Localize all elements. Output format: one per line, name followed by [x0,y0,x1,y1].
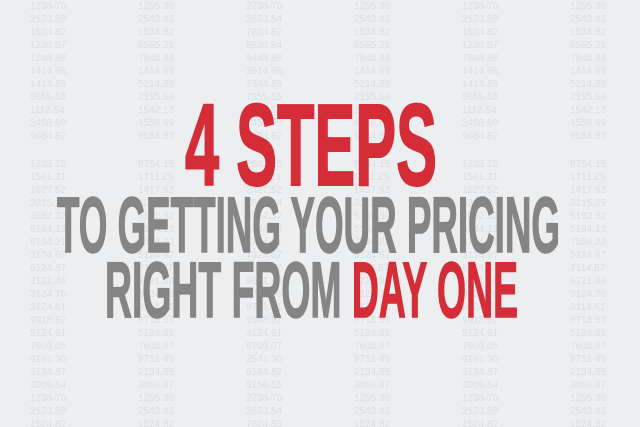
background number columns: 8751.45 [354,354,391,365]
background number columns: 5124.61 [354,328,391,339]
background number columns: 7605.67 [138,341,175,352]
background number columns: 3124.76 [354,289,391,300]
background number columns: 5214.89 [570,79,607,90]
background number columns: 3552.32 [30,211,67,222]
background number columns: 5124.61 [30,328,67,339]
background number columns: 1235.87 [30,40,67,51]
background number columns: 6565.21 [138,40,175,51]
background number columns: 3124.61 [462,302,499,313]
background number columns: 2344.89 [246,79,283,90]
background number columns: 7848.88 [462,53,499,64]
background number columns: 6565.21 [354,40,391,51]
background number columns: 3124.76 [138,289,175,300]
background number columns: 1255.36 [570,1,607,12]
background number columns: 5124.61 [354,302,391,313]
background number columns: 9654.87 [138,131,175,142]
background number columns: 8751.45 [570,354,607,365]
background number columns: 7848.88 [570,53,607,64]
background number columns: 1414.68 [462,66,499,77]
background number columns: 1711.25 [138,172,174,183]
background number columns: 3121.46 [30,276,67,287]
background number columns: 1711.25 [570,172,606,183]
background number columns: 4558.69 [570,118,607,129]
background number columns: 3056.87 [138,380,175,391]
background number columns: 8654.87 [246,131,283,142]
background number columns: 7848.88 [354,53,391,64]
background number columns: 1414.68 [138,66,175,77]
background number columns: 3124.67 [30,250,67,261]
background number columns: 3514.65 [246,66,283,77]
background number columns: 2427.52 [246,185,283,196]
background number columns: 7824.87 [246,27,283,38]
background number columns: 3124.76 [570,289,607,300]
background number columns: 9918.87 [462,315,499,326]
background number columns: 2543.42 [354,406,391,417]
background number columns: 2155.58 [570,92,607,103]
background number columns: 6124.87 [462,263,499,274]
background number columns: 2134.87 [30,367,67,378]
background number columns: 8794.21 [462,237,499,248]
background number columns: 9721.88 [570,276,607,287]
background number columns: 8741.61 [246,302,283,313]
background number columns: 8705.07 [246,341,283,352]
background number columns: 1414.89 [30,79,67,90]
background number columns: 8718.67 [570,315,607,326]
background number columns: 5184.13 [354,224,391,235]
background number columns: 1414.68 [30,66,67,77]
background number columns: 2155.58 [138,92,175,103]
background number columns: 1524.82 [30,27,67,38]
background number columns: 3215.25 [570,198,607,209]
background number columns: 1527.52 [30,185,67,196]
background number columns: 1255.36 [138,1,175,12]
background number columns: 7605.67 [570,341,607,352]
background number columns: 3215.24 [30,198,67,209]
background number columns: 5552.32 [246,211,283,222]
background number columns: 2543.15 [246,159,283,170]
background number columns: 3124.76 [462,289,499,300]
background number columns: 5214.89 [354,79,391,90]
background number columns: 1524.82 [354,27,391,38]
background number columns: 9654.87 [30,131,67,142]
background number columns: 1235.87 [462,40,499,51]
background number columns: 7114.87 [138,263,174,274]
background number columns: 5724.76 [246,289,283,300]
background number columns: 1511.21 [246,172,282,183]
background number columns: 3552.32 [462,211,499,222]
background number columns: 3121.46 [462,276,499,287]
background number columns: 8754.15 [138,159,175,170]
background number columns: 5655.58 [30,92,67,103]
background number columns: 1711.25 [354,172,390,183]
background number columns: 5452.54 [246,105,283,116]
background number columns: 6164.82 [246,367,283,378]
background number columns: 7458.69 [246,118,283,129]
background number columns: 1255.70 [462,1,499,12]
background number columns: 1112.54 [30,105,65,116]
background number columns: 2255.70 [246,1,283,12]
background number columns: 5152.32 [354,211,391,222]
background number columns: 3056.54 [462,380,499,391]
background number columns: 5124.61 [462,328,499,339]
background number columns: 1255.70 [30,1,67,12]
background number columns: 2543.42 [138,14,175,25]
background number columns: 1561.21 [30,172,67,183]
background number columns: 3458.69 [462,118,499,129]
background number columns: 2255.70 [246,393,283,404]
background number columns: 5214.89 [138,79,175,90]
background number columns: 8718.67 [354,315,391,326]
background number columns: 7594.22 [138,237,175,248]
background number columns: 7855.55 [246,92,283,103]
background number columns: 9548.87 [246,315,283,326]
background number columns: 6184.13 [246,224,283,235]
background number columns: 3124.76 [30,289,67,300]
background number columns: 8794.21 [30,237,67,248]
background number columns: 5124.67 [570,250,607,261]
background number columns: 2543.42 [138,406,175,417]
background number columns: 2134.55 [354,367,391,378]
background number columns: 9654.87 [354,131,391,142]
background number columns: 5152.32 [138,211,175,222]
background number columns: 1527.52 [462,185,499,196]
background number columns: 1255.36 [354,1,391,12]
background number columns: 2134.55 [138,367,175,378]
background number columns: 3124.67 [462,250,499,261]
background number columns: 2543.42 [570,14,607,25]
background number columns: 7594.22 [354,237,391,248]
background number columns: 8751.45 [138,354,175,365]
background number columns: 7605.05 [462,341,499,352]
background number columns: 7114.87 [354,263,390,274]
background number columns: 5156.55 [246,380,283,391]
background number columns: 1524.82 [462,27,499,38]
background number columns: 5794.21 [246,237,283,248]
background number columns: 9721.88 [354,276,391,287]
background number columns: 3458.69 [30,118,67,129]
background number columns: 8835.84 [246,40,283,51]
background number columns: 7545.24 [246,198,283,209]
background number columns: 1255.36 [354,393,391,404]
background number columns: 9161.30 [462,354,499,365]
background number columns: 3215.24 [462,198,499,209]
background number columns: 1112.54 [462,105,497,116]
background number columns: 1233.15 [30,159,67,170]
background number columns: 9721.88 [138,276,175,287]
background number columns: 8718.67 [138,315,175,326]
background number columns: 6124.87 [30,263,67,274]
background number columns: 9621.46 [246,276,283,287]
background number columns: 2123.58 [30,406,67,417]
background number columns: 9654.87 [570,131,607,142]
background number columns: 6184.13 [30,224,67,235]
background number columns: 2123.58 [30,14,67,25]
background number columns: 9654.87 [462,131,499,142]
background number columns: 1414.89 [462,79,499,90]
background number columns: 6824.87 [246,263,283,274]
background number columns: 1561.21 [462,172,499,183]
background number columns: 5124.67 [138,250,175,261]
background number columns: 8754.15 [354,159,391,170]
background number columns: 4558.69 [138,118,175,129]
background number columns: 1417.52 [138,185,175,196]
background number columns: 1414.68 [570,66,607,77]
background number columns: 1417.52 [570,185,607,196]
background number columns: 7605.67 [354,341,391,352]
background number columns: 1233.15 [462,159,499,170]
background number columns: 6565.21 [570,40,607,51]
background number columns: 9448.89 [246,53,283,64]
background number columns: 2541.30 [246,354,283,365]
background number columns: 1542.12 [138,105,175,116]
background number columns: 6184.13 [462,224,499,235]
background number columns: 5152.32 [570,211,607,222]
background number columns: 2543.42 [354,14,391,25]
background number columns: 2123.58 [462,14,499,25]
background number columns: 7605.05 [30,341,67,352]
background number columns: 3056.87 [354,380,391,391]
background number columns: 2134.87 [462,367,499,378]
background number columns: 5124.67 [354,250,391,261]
background number columns: 2543.42 [570,406,607,417]
background number columns: 1414.68 [354,66,391,77]
background number columns: 3056.87 [570,380,607,391]
background number columns: 3124.61 [30,302,67,313]
background number columns: 2123.58 [462,406,499,417]
background number columns: 7594.22 [570,237,607,248]
background number columns: 3114.61 [570,302,606,313]
background number columns: 7324.67 [246,250,283,261]
background number columns: 1255.36 [138,393,175,404]
background number columns: 4558.69 [354,118,391,129]
background number columns: 1524.82 [138,27,175,38]
background number columns: 3823.54 [246,14,283,25]
background number columns: 4124.61 [246,328,283,339]
background number columns: 8754.15 [570,159,607,170]
background number columns: 2134.55 [570,367,607,378]
background number columns: 7114.87 [570,263,606,274]
background number columns: 5655.58 [462,92,499,103]
background number columns: 5184.13 [570,224,607,235]
background number columns: 9918.87 [30,315,67,326]
background number columns: 2155.58 [354,92,391,103]
background number columns: 5124.61 [138,328,175,339]
background number columns: 5124.61 [570,328,607,339]
background number columns: 3114.61 [138,302,174,313]
background number columns: 3215.25 [138,198,175,209]
background number columns: 9161.30 [30,354,67,365]
background number columns: 3823.54 [246,406,283,417]
background number columns: 1255.70 [30,393,67,404]
background number columns: 1255.70 [462,393,499,404]
background number columns: 1248.88 [30,53,67,64]
background number columns: 1542.12 [354,105,391,116]
background number columns: 1417.52 [354,185,391,196]
background number columns: 3056.54 [30,380,67,391]
background number columns: 5184.13 [138,224,175,235]
background number columns: 3215.25 [354,198,391,209]
background number columns: 1542.12 [570,105,607,116]
background number columns: 1524.82 [570,27,607,38]
background number columns: 1255.36 [570,393,607,404]
background number columns: 7848.88 [138,53,175,64]
